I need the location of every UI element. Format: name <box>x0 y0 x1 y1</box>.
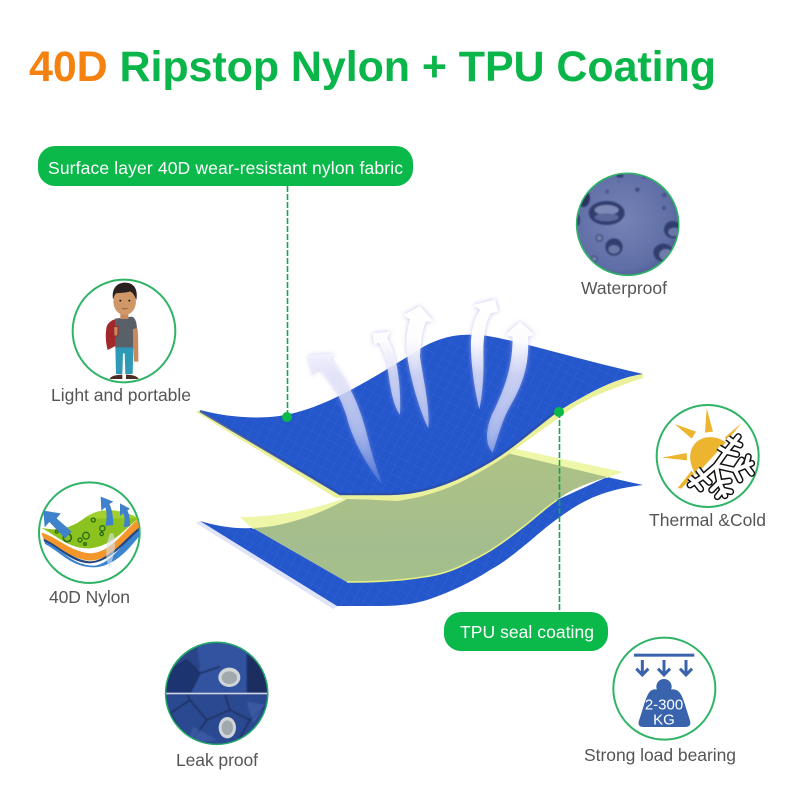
icon: waterproof droplets <box>575 173 681 275</box>
label: light and portable: Light and portable <box>51 385 191 405</box>
label: thermal and cold: Thermal &Cold <box>649 510 766 530</box>
icon: load bearing weight: 2-300 <box>645 696 683 713</box>
leader line: TPU coating <box>554 407 564 612</box>
TPU coating layer <box>240 447 623 582</box>
leader line: surface layer <box>282 186 292 422</box>
icon: load bearing weight: KG <box>653 711 675 728</box>
airflow arrows <box>308 299 535 485</box>
title: 40D Ripstop Nylon + TPU Coating <box>29 43 716 91</box>
diagram: fabric layers <box>196 299 643 609</box>
label: strong load bearing: Strong load bearing <box>584 745 736 765</box>
label: leak proof: Leak proof <box>176 750 258 770</box>
upper nylon sheet <box>196 335 643 501</box>
label: 40D Nylon: 40D Nylon <box>49 587 130 607</box>
lower nylon sheet <box>196 477 643 609</box>
icon: nylon layers <box>39 482 140 583</box>
callout: TPU seal coating <box>444 612 608 651</box>
callout: TPU seal coating: TPU seal coating <box>460 622 594 642</box>
icon: thermal and cold <box>657 405 759 507</box>
label: waterproof: Waterproof <box>581 278 667 298</box>
callout: surface layer: Surface layer 40D wear-resistant nylon fabric <box>48 158 403 178</box>
icon: leak proof valves <box>165 642 268 745</box>
callout: surface layer <box>38 146 413 186</box>
icon: load bearing weight <box>613 638 715 740</box>
icon: backpacker <box>73 280 175 382</box>
